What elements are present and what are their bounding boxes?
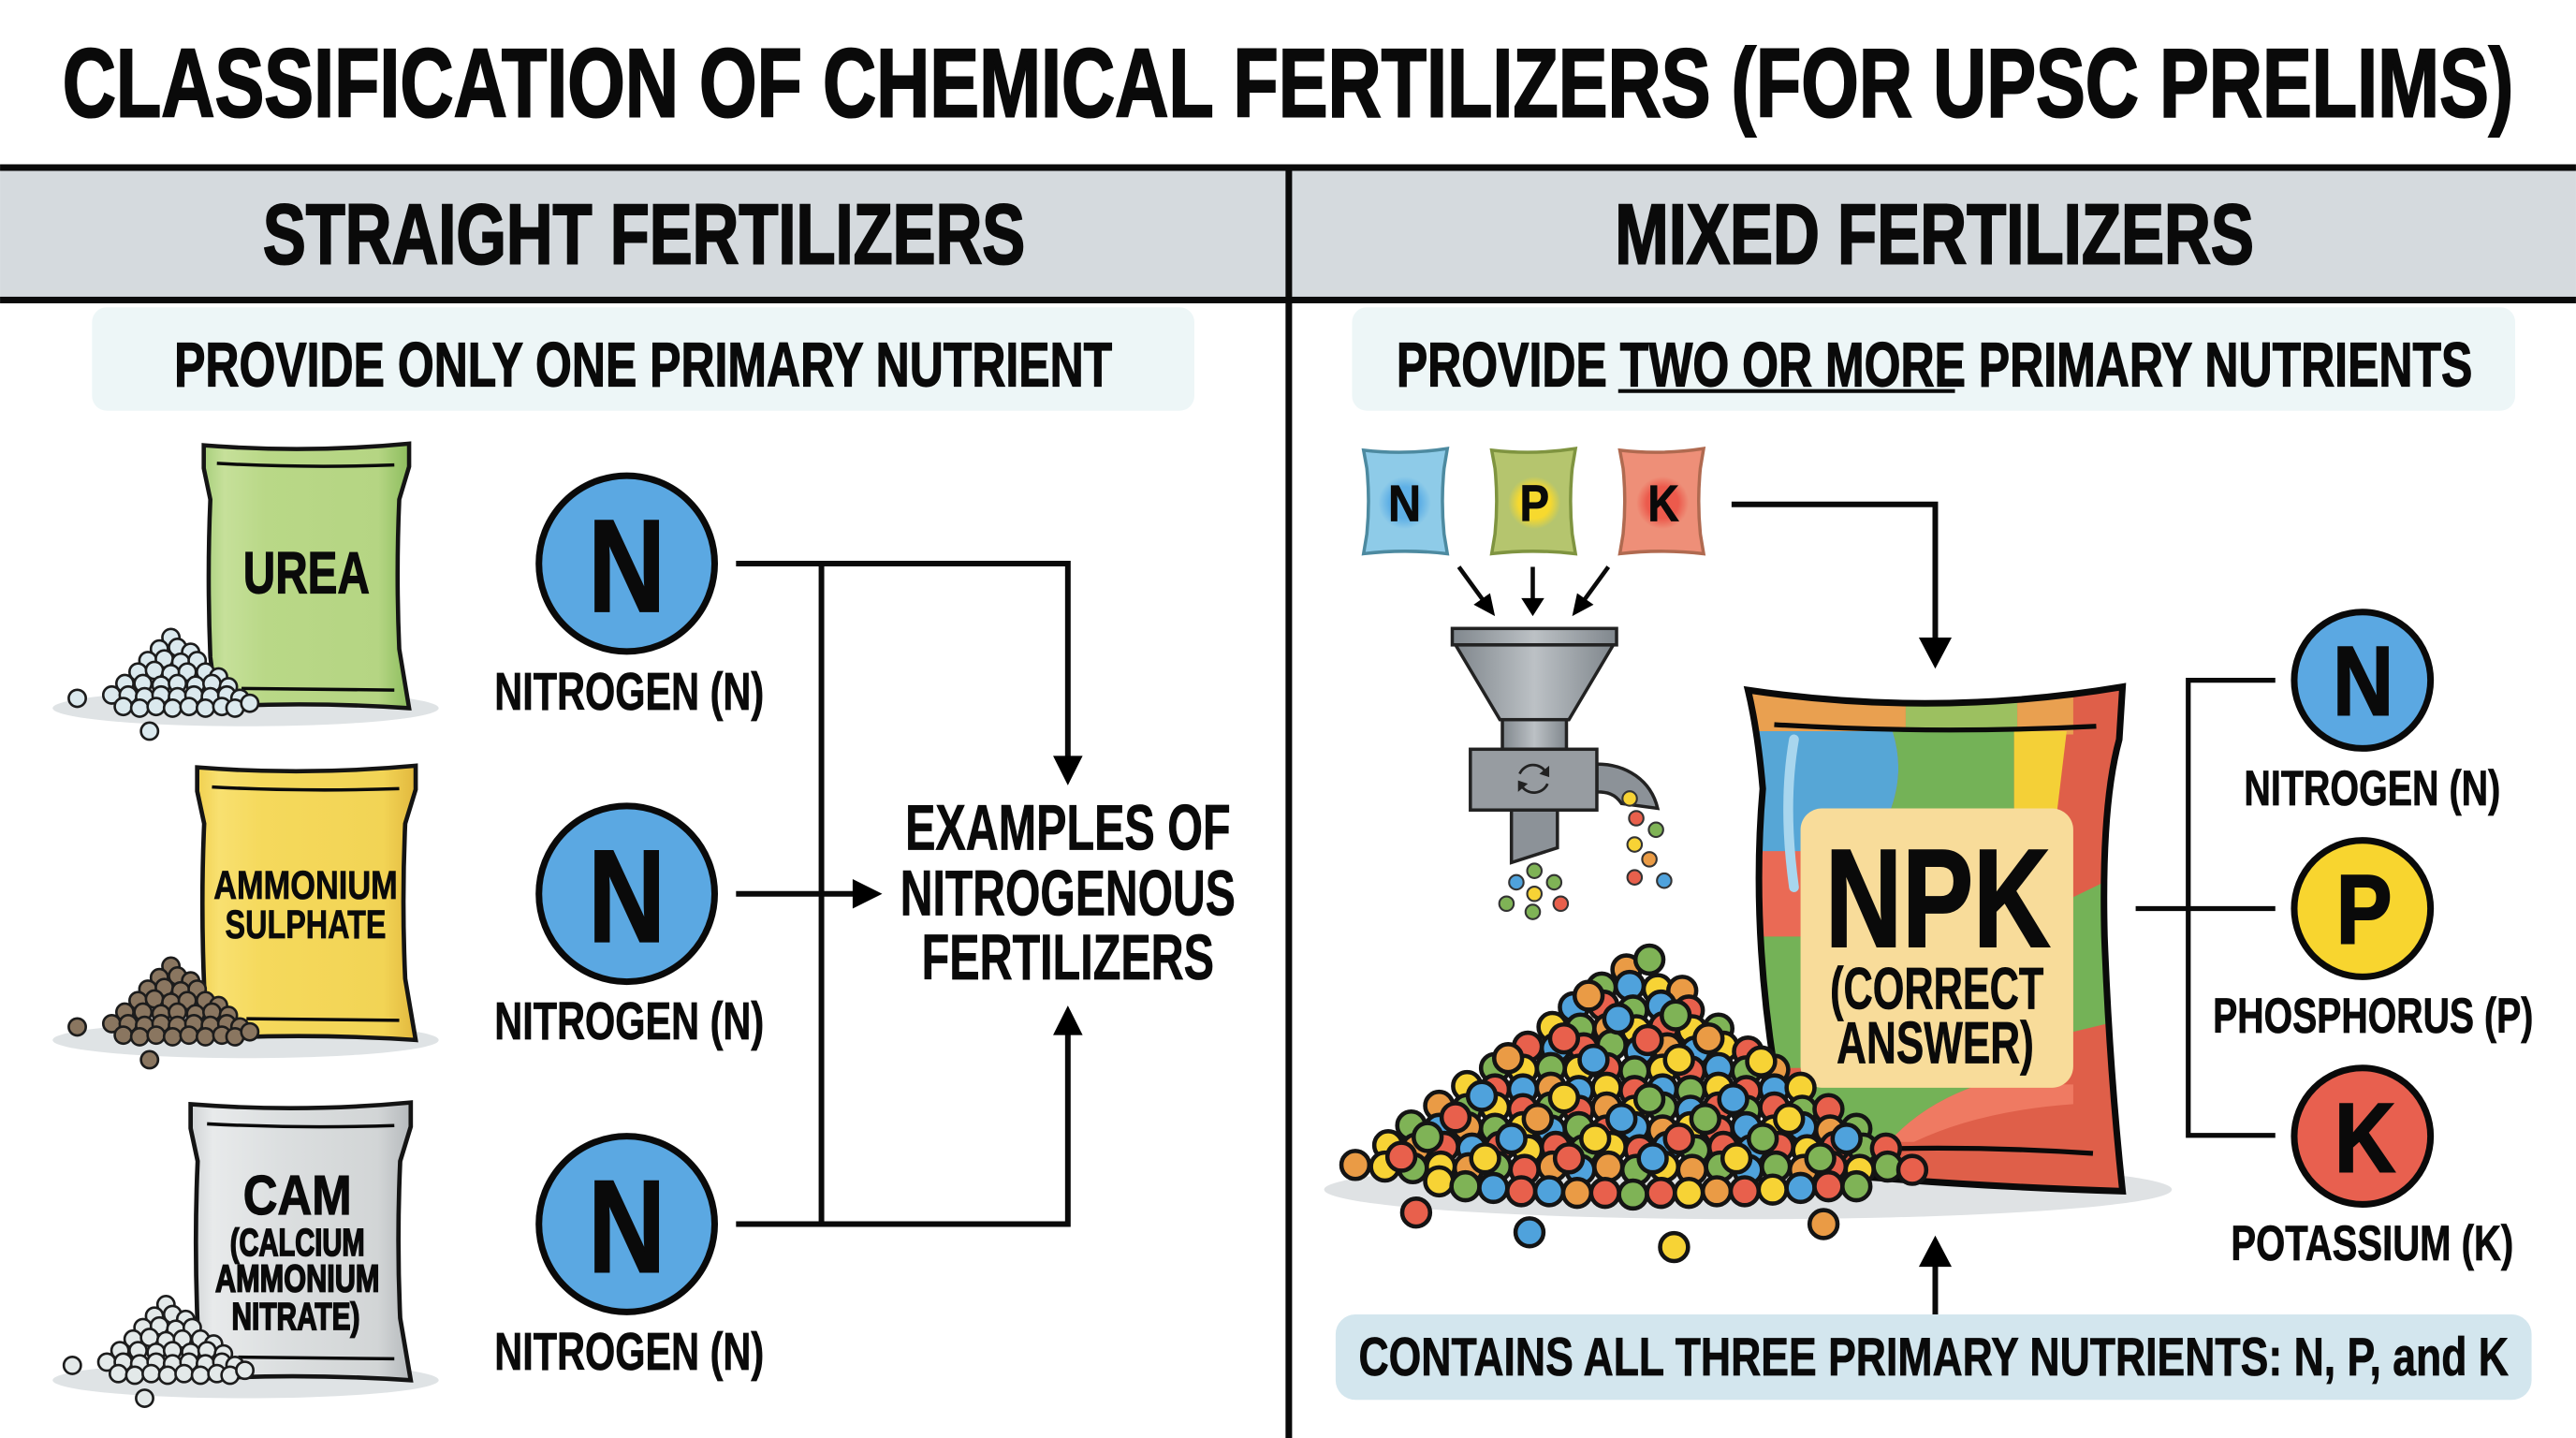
nitrogen badge 2 — [494, 806, 764, 1050]
panel: straight fertilizers — [52, 307, 1236, 1407]
header band: mixed fertilizers — [1288, 168, 2576, 299]
connector arrows — [736, 564, 1083, 1224]
nitrogen badge: N — [2333, 626, 2393, 736]
npk bag — [1741, 682, 2136, 1199]
ammonium sulphate bag with pellets — [52, 766, 439, 1068]
potassium badge — [2231, 1068, 2513, 1271]
header band: mixed fertilizers: MIXED FERTILIZERS — [1615, 187, 2254, 283]
header band: straight fertilizers: STRAIGHT FERTILIZERS — [263, 187, 1025, 283]
arrow from banner to bag — [1919, 1236, 1952, 1316]
nitrogen badge — [2244, 612, 2500, 816]
label: examples of nitrogenous fertilizers: NITROGENOUS — [900, 858, 1236, 930]
label: examples of nitrogenous fertilizers — [900, 791, 1236, 993]
nitrogen badge 1 — [494, 476, 764, 721]
npk label: ANSWER) — [1837, 1011, 2034, 1077]
small nutrient bag N: N — [1388, 475, 1421, 532]
npk label: NPK — [1825, 820, 2050, 976]
phosphorus badge: P — [2336, 855, 2392, 964]
nitrogen badge 2: N — [588, 823, 666, 970]
falling pellets — [1500, 791, 1672, 919]
small nutrient bag N — [1364, 448, 1447, 553]
cam bag with pellets: AMMONIUM — [215, 1256, 379, 1299]
ammonium sulphate bag with pellets: AMMONIUM — [213, 863, 398, 908]
small nutrient bag P — [1492, 448, 1575, 553]
cam bag with pellets: NITRATE) — [232, 1295, 359, 1338]
npk pellet pile — [1341, 946, 1926, 1261]
small nutrient bag P: P — [1519, 475, 1549, 532]
potassium badge: K — [2334, 1083, 2395, 1193]
nitrogen badge 3 — [494, 1137, 764, 1381]
header band: straight fertilizers — [0, 168, 1288, 299]
nitrogen badge 3: NITROGEN (N) — [494, 1322, 764, 1381]
nitrogen badge: NITROGEN (N) — [2244, 761, 2500, 816]
urea bag with pellets — [52, 444, 439, 740]
cam bag with pellets: CAM — [243, 1164, 352, 1226]
urea bag with pellets: UREA — [243, 541, 370, 607]
blending machine — [1453, 628, 1658, 862]
nitrogen badge 3: N — [588, 1152, 666, 1299]
subtitle: two or more primary nutrients — [1352, 307, 2515, 411]
nitrogen badge 1: NITROGEN (N) — [494, 662, 764, 721]
subtitle: only one primary nutrient: PROVIDE ONLY ONE PRIMARY NUTRIENT — [174, 330, 1112, 400]
arrow to npk bag — [1732, 505, 1952, 668]
subtitle: only one primary nutrient — [92, 307, 1194, 411]
npk label: (CORRECT — [1830, 957, 2043, 1022]
panel: mixed fertilizers — [1325, 307, 2533, 1400]
nitrogen badge 1: N — [588, 492, 666, 639]
connector lines to nutrient badges — [2136, 681, 2276, 1136]
small nutrient bag K — [1620, 448, 1704, 553]
npk label — [1801, 808, 2073, 1088]
nitrogen badge 2: NITROGEN (N) — [494, 991, 764, 1050]
small nutrient bag K: K — [1647, 475, 1679, 532]
label: examples of nitrogenous fertilizers: EXAMPLES OF — [905, 791, 1231, 863]
phosphorus badge — [2213, 841, 2533, 1044]
label: examples of nitrogenous fertilizers: FERTILIZERS — [922, 921, 1214, 993]
cam bag with pellets — [52, 1103, 439, 1407]
cam bag with pellets: (CALCIUM — [230, 1221, 365, 1264]
arrows into funnel — [1459, 566, 1608, 616]
banner: all three primary nutrients — [1336, 1314, 2532, 1400]
ground shadow — [1325, 1160, 2172, 1219]
ammonium sulphate bag with pellets: SULPHATE — [225, 902, 386, 947]
